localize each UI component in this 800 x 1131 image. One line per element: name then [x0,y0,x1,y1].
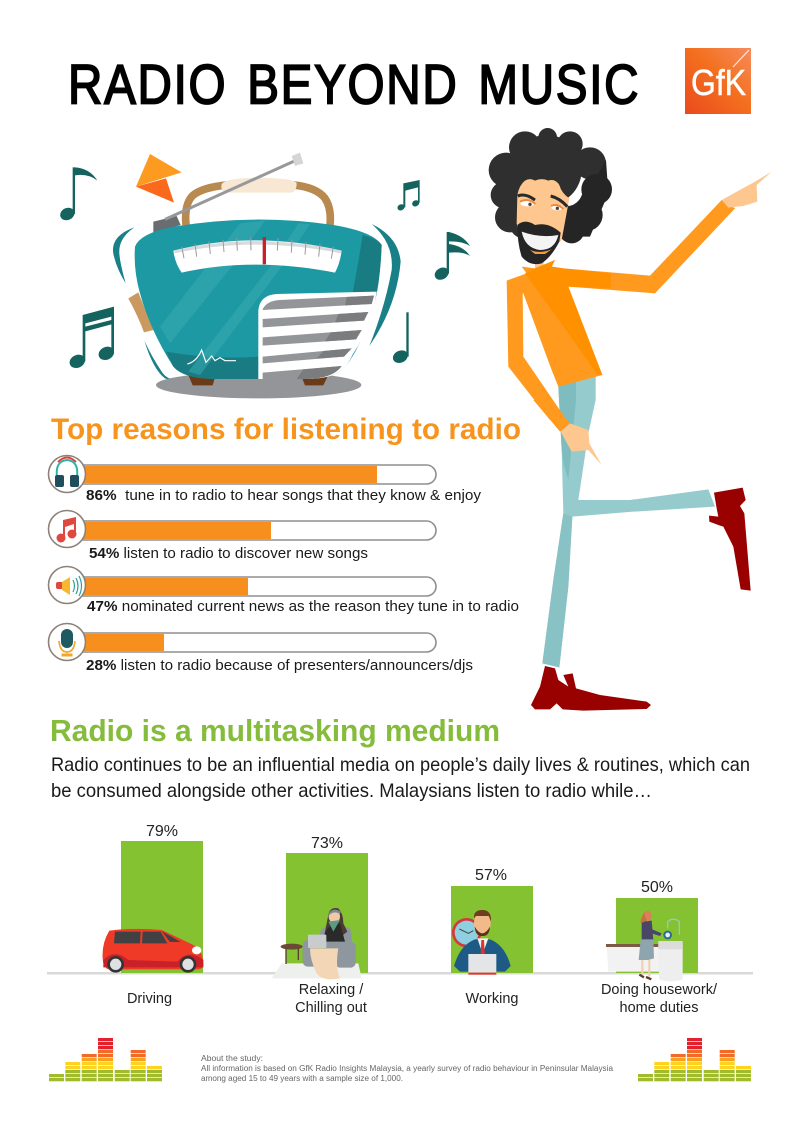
icon: music note right [432,232,470,282]
trousers shade [558,380,576,480]
bar 54% [70,521,436,540]
raised shoe [709,488,751,591]
text 28%: 28% listen to radio because of presenters/announcers/djs [86,657,473,674]
smile [522,232,558,250]
radio signature [187,350,236,364]
bar: working: 57% [475,867,507,884]
icon: beamed note bottom left [67,307,116,370]
bar chart: activities [47,823,753,1016]
eyes and brows [518,195,567,210]
radio body shade [350,235,382,307]
bar: housework [616,879,698,973]
title: RADIO BEYOND MUSIC [68,54,640,116]
sweater [507,200,735,420]
about the study: among aged 15 to 49 years with a sample size of 1,000. [201,1074,403,1083]
bar: housework: 50% [641,879,673,896]
bar: driving: 79% [146,823,178,840]
category label: housework [601,982,718,1016]
bar: driving [121,823,203,973]
icon: music note bottom right [391,312,410,365]
radio body [135,220,382,379]
face [517,179,569,253]
bar: relaxing: 73% [311,835,343,852]
icon: man at laptop [452,910,511,975]
bar: relaxing [286,835,368,973]
icon: headphones [48,456,86,492]
icon: orange kite [136,154,182,203]
radio feet [188,375,328,385]
icon: speaker [48,566,86,604]
radio tuner dial [173,237,342,273]
pointing hand [722,172,772,208]
about the study [201,1054,614,1083]
beard and moustache [517,222,561,264]
logo: GfK: GfK [691,62,746,103]
text 47%: 47% nominated current news as the reason they tune in to radio [87,598,519,615]
about the study: About the study: [201,1054,263,1063]
heading: multitasking: Radio is a multitasking medium [50,713,500,748]
chart baseline [47,972,753,974]
standing shoe [531,666,651,711]
antenna [153,153,303,233]
category label: relaxing: Relaxing / [299,982,364,998]
equaliser: right [638,1038,751,1081]
about the study: All information is based on GfK Radio Insights Malaysia, a yearly survey of radio behaviour in Peninsular Malaysia [201,1064,614,1073]
radio glass highlights [160,221,310,375]
category label: housework: home duties [620,1000,698,1016]
icon: music note top left [58,167,97,223]
category label: housework: Doing housework/ [601,982,718,998]
lower hand [561,423,602,465]
intro text: be consumed alongside other activities. Malaysians listen to radio while… [51,780,652,802]
icon: woman washing dishes [606,911,683,981]
illustration: man pointing, upper body [489,128,772,420]
icon: microphone [48,624,86,660]
icon: woman relaxing [272,908,362,979]
intro text: Radio continues to be an influential media on people’s daily lives & routines, which can [51,754,750,776]
equaliser: left [49,1038,162,1081]
radio shadow [156,372,361,398]
logo: GfK [685,48,751,114]
hair shade [559,160,612,243]
bar 47% [70,577,436,596]
heading: top reasons: Top reasons for listening to radio [51,413,521,446]
illustration: man hand and shoes [531,400,751,711]
bar 28% [70,633,436,652]
neck [535,257,544,275]
bar: working [451,867,533,973]
intro text [51,754,750,802]
category label: relaxing: Chilling out [295,1000,367,1016]
sleeve end [533,400,570,432]
bar 86% [70,465,436,484]
hair [489,128,606,238]
icon: beamed note top right [396,180,420,212]
category label: working: Working [466,991,518,1007]
icon: sound waves [113,224,401,380]
panel: reason bars [48,456,519,674]
category label: relaxing [295,982,367,1016]
radio handle [186,178,330,225]
radio speaker grille [258,292,377,379]
text 86%: 86% tune in to radio to hear songs that they know & enjoy [86,487,481,504]
illustration: radio with music notes [58,153,420,398]
text 54%: 54% listen to radio to discover new songs [89,545,368,562]
radio knob side [128,292,153,332]
illustration: man trousers [542,373,715,667]
sweater shade [525,260,611,375]
category label: driving: Driving [127,991,172,1007]
icon: red car [103,929,203,973]
icon: red music note [48,510,86,548]
trousers [542,373,715,667]
